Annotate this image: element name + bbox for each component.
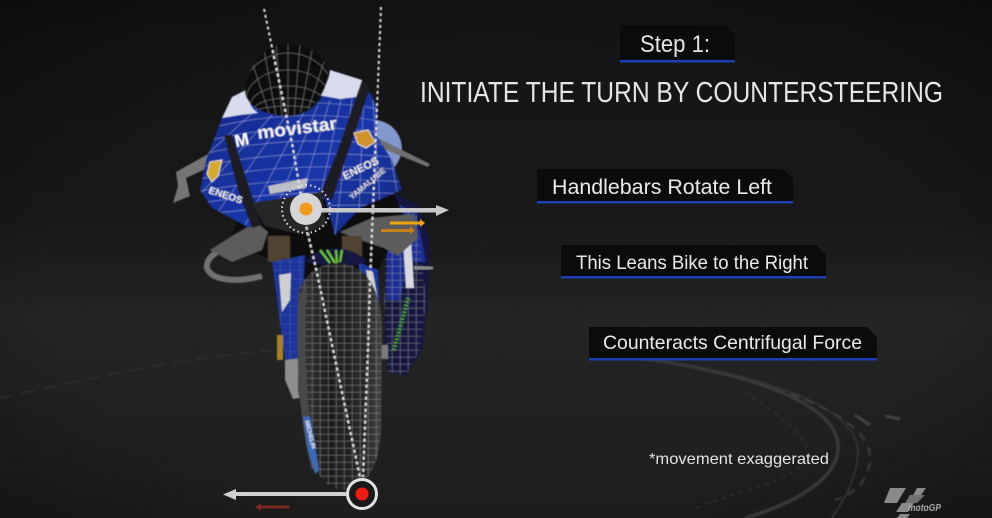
front tyre	[297, 263, 382, 490]
nose decal	[268, 178, 308, 194]
left fork	[272, 255, 305, 360]
wheel rim	[297, 282, 316, 470]
MotoGP logo	[884, 488, 941, 518]
pivot	[290, 193, 322, 225]
left grey hoop	[207, 240, 262, 280]
lower arrow	[223, 480, 376, 508]
step label: Step 1:	[640, 31, 710, 58]
pivot ring dotted	[282, 185, 330, 233]
callout: counteracts: Counteracts Centrifugal Force	[603, 332, 862, 354]
fairing black stripes	[224, 80, 370, 228]
orange arrow lower	[381, 226, 415, 234]
badge left	[207, 160, 222, 182]
motorcycle	[173, 7, 433, 490]
grey lower wings	[210, 214, 418, 262]
brake caliper	[285, 358, 306, 399]
contact dot	[356, 488, 368, 500]
upper arrow	[282, 185, 449, 233]
Michelin text: MICHELIN	[303, 420, 316, 450]
air intake	[252, 192, 326, 234]
callout: handlebars	[537, 169, 793, 204]
right caliper	[380, 345, 388, 359]
right lever	[376, 138, 430, 167]
contact ring	[348, 480, 376, 508]
movistar logo: M	[233, 129, 251, 151]
fairing	[190, 70, 405, 235]
callout: handlebars: Handlebars Rotate Left	[552, 176, 772, 199]
movistar: movistar	[256, 113, 338, 143]
right mirror	[372, 120, 402, 178]
rear body	[384, 190, 433, 376]
dotted axis lines	[264, 7, 381, 477]
ENEOS right: ENEOS	[341, 155, 381, 183]
callout: leans	[561, 245, 826, 278]
floor track lines	[0, 350, 900, 518]
footnote: *movement exaggerated	[649, 451, 829, 468]
tyre sidewall label	[303, 416, 319, 474]
pivot orange	[300, 202, 312, 216]
step label	[620, 25, 735, 62]
fairing curved mesh	[200, 98, 400, 236]
fairing white top	[222, 70, 364, 118]
left winglet	[173, 153, 212, 203]
callout: counteracts	[589, 327, 877, 360]
badge right	[354, 130, 375, 148]
MotoGP logo: motoGP	[908, 503, 941, 514]
lower fairing dark area	[230, 195, 408, 285]
Yamaha sponsor: YAMALUBE	[348, 166, 388, 202]
callout: leans: This Leans Bike to the Right	[576, 252, 809, 274]
windscreen mesh	[244, 44, 328, 116]
orange arrow top	[390, 219, 425, 227]
right fork	[358, 262, 382, 350]
fork stanchions	[268, 236, 362, 262]
fender with monster logo	[305, 248, 368, 268]
fork gold slider	[277, 335, 283, 360]
red arrow	[255, 503, 289, 511]
ENEOS left: ENEOS	[207, 185, 244, 207]
